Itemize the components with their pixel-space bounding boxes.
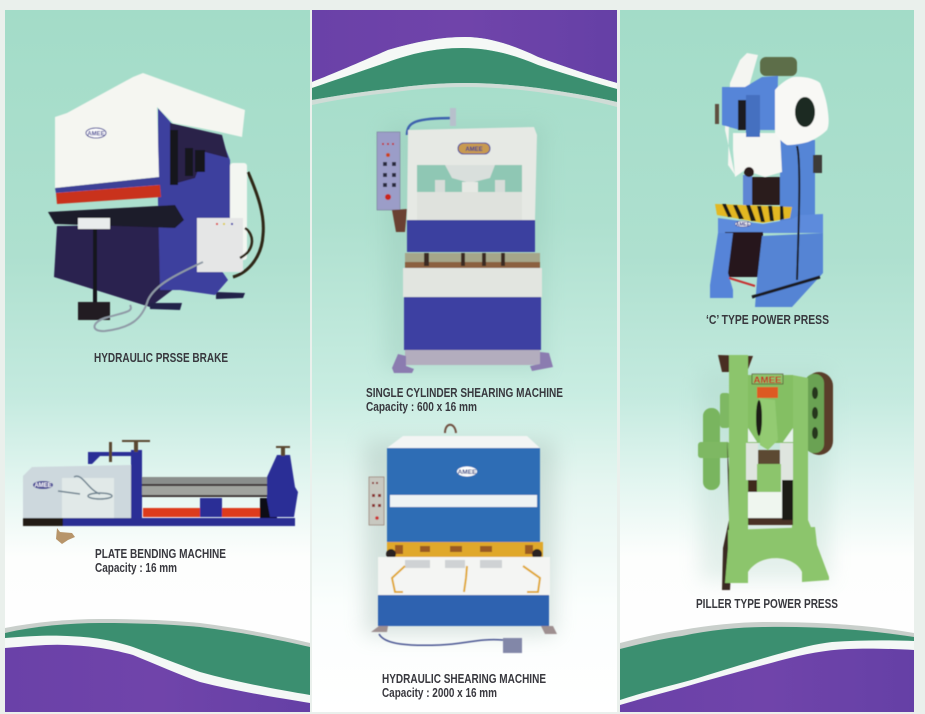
hazard table [715, 204, 792, 223]
side cylinder [230, 163, 247, 260]
dark throat [752, 177, 780, 205]
logo: AMEE [34, 483, 52, 489]
blue head [722, 76, 778, 130]
brown plate [392, 209, 407, 232]
screws [109, 440, 290, 462]
ram [759, 398, 778, 450]
blue band [407, 220, 535, 252]
panel: left [5, 10, 310, 712]
rear column [780, 140, 815, 230]
opening [748, 480, 792, 520]
nameplate: AMEE [465, 147, 483, 153]
blade area [405, 253, 540, 268]
hose [233, 172, 263, 277]
brake rod [797, 146, 799, 280]
caption: hydraulic shearing: HYDRAULIC SHEARING MACHINE [382, 672, 546, 686]
inner guides [746, 443, 758, 480]
center plate [748, 375, 793, 443]
yellow lines [392, 566, 540, 592]
red blade [56, 185, 161, 204]
blue base [378, 595, 549, 626]
right wheel [805, 372, 833, 455]
cylinder [445, 165, 495, 183]
plate gaps [748, 428, 793, 442]
base body [54, 224, 192, 307]
blue base [404, 297, 541, 350]
pipes [407, 118, 455, 135]
name plate: AMEE [754, 375, 782, 386]
logo [457, 466, 477, 476]
leg opening [725, 232, 763, 277]
control box [197, 218, 243, 272]
logo: AMEE [458, 469, 477, 476]
screw [715, 104, 719, 124]
operator box [78, 218, 110, 229]
blue frame [158, 108, 231, 295]
inner panel [62, 478, 114, 518]
caption: plate bending: PLATE BENDING MACHINE [95, 547, 226, 561]
dark upper recess [170, 123, 228, 185]
stain [56, 528, 75, 544]
machine: hydraulic shearing [369, 425, 557, 653]
logo [33, 481, 53, 489]
buttons [216, 223, 218, 225]
feet [371, 626, 557, 634]
rear flywheel [725, 53, 758, 175]
machine: plate bending [23, 440, 298, 526]
bottom wave: right panel [620, 622, 914, 712]
base top [718, 214, 823, 233]
slide block [758, 450, 780, 464]
machine: pillar type power press [698, 355, 833, 590]
flywheel [775, 77, 829, 145]
control panel [377, 132, 400, 210]
capacity: plate bending: Capacity : 16 mm [95, 561, 177, 575]
side switch [813, 155, 822, 173]
white bed [378, 557, 550, 595]
foot pedal [503, 638, 522, 653]
machine shadow: hydraulic shearing [365, 440, 555, 635]
top wave: center panel [312, 10, 617, 107]
cap [718, 355, 753, 372]
yellow clamps [387, 542, 543, 557]
top valve [450, 108, 456, 126]
base [23, 518, 63, 526]
grey base [405, 350, 540, 365]
red tie rod [729, 278, 755, 286]
white mid body [733, 133, 782, 177]
window [417, 165, 522, 192]
blue strip [55, 177, 160, 193]
motor [760, 57, 797, 76]
pedal [752, 277, 820, 297]
control panel [369, 477, 384, 525]
columns [131, 450, 142, 520]
feet [392, 354, 414, 373]
hook [445, 425, 456, 433]
machine shadow: pillar press [700, 370, 830, 580]
left wheel [720, 393, 730, 428]
pedal pole [93, 229, 97, 302]
base [725, 527, 829, 583]
pedal [78, 302, 110, 320]
caption: pillar type: PILLER TYPE POWER PRESS [696, 597, 838, 611]
panel: right [620, 10, 914, 712]
hydraulic valves [170, 130, 205, 185]
bench [48, 205, 184, 228]
caption: single cylinder: SINGLE CYLINDER SHEARING MACHINE [366, 386, 563, 400]
top white cover [387, 436, 540, 448]
machine: C type power press [710, 53, 829, 307]
body cover [23, 465, 132, 518]
logo: AMEE [87, 132, 105, 138]
center support [200, 498, 222, 517]
cable coil [58, 476, 100, 494]
feet [150, 292, 245, 310]
cable [94, 262, 203, 331]
lower white bed [403, 268, 542, 297]
blue housing [387, 448, 540, 542]
caption: C type: ‘C’ TYPE POWER PRESS [706, 313, 829, 327]
capacity: single cylinder: Capacity : 600 x 16 mm [366, 400, 477, 414]
machine shadow: single cylinder [385, 125, 545, 370]
nameplate [458, 143, 490, 154]
dark rear left [722, 440, 733, 590]
caption: hydraulic press brake: HYDRAULIC PRSSE BRAKE [94, 351, 228, 365]
red bar [143, 508, 260, 517]
upper white frame [407, 127, 537, 220]
red block [757, 387, 778, 398]
cable [379, 634, 503, 645]
left column [729, 355, 748, 531]
machine: hydraulic press brake [48, 73, 263, 331]
top white housing [55, 73, 245, 188]
rolls [142, 477, 280, 486]
machine: single cylinder shearing [377, 108, 553, 373]
bottom wave: left panel [5, 619, 310, 712]
panel: center [312, 10, 617, 712]
logo [86, 128, 106, 138]
right column [792, 375, 813, 532]
capacity: hydraulic shearing: Capacity : 2000 x 16 mm [382, 686, 497, 700]
legs [710, 233, 733, 298]
logo: AMEE [736, 222, 751, 228]
white strip [390, 495, 537, 507]
